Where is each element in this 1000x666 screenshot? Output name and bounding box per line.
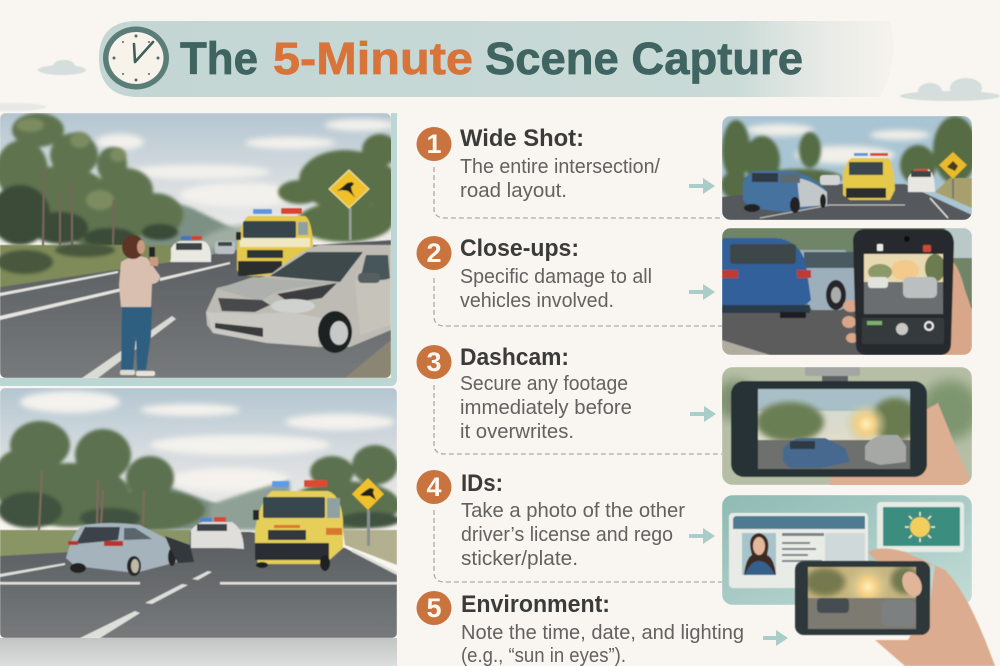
grey band under bottom photo [0,638,397,666]
body: dashcam [460,373,632,443]
title text: The [180,33,258,84]
footage screen [756,389,919,470]
thumbnail 3: dashcam footage [715,367,980,490]
phone landscape [731,381,927,477]
hand [868,548,995,666]
body: dashcam: it overwrites. [460,421,574,443]
blue hatchback [743,171,828,213]
hand and phone: environment capture [795,548,995,666]
step 1 [416,125,722,218]
heading: IDs: IDs: [461,470,503,497]
arrow [689,528,715,544]
ambulance [236,208,313,276]
road [0,240,391,378]
dashed connector [434,278,722,326]
licence card [729,513,868,588]
phone screen [805,565,919,629]
road [0,532,397,638]
police car [171,236,211,262]
title text: 5-Minute [273,33,473,84]
tree line [0,113,399,255]
body: IDs [461,500,685,570]
arrow [689,178,715,194]
body: IDs: driver’s license and rego [461,524,673,546]
police car [908,169,935,192]
decorative clouds [0,60,1000,111]
number badge 2 [416,236,452,270]
dashed connector [434,510,722,582]
number badge 5 [416,591,452,625]
phone body [795,561,930,635]
title text [180,33,803,84]
number badge 1 [416,127,452,161]
road markings [0,262,230,378]
hand [830,403,970,490]
panel: bottom photo, intersection with ambulance [0,388,400,638]
trees [0,421,400,530]
body: dashcam: immediately before [460,397,632,419]
photo frame: teal edge of top photo [0,113,397,386]
heading: Close-ups: Close-ups: [460,235,579,262]
number badge 5: 5 [426,593,442,623]
hand holding phone [842,258,972,355]
title banner [99,21,893,97]
ambulance [843,153,895,200]
silver-blue car [798,250,862,310]
number badge 1: 1 [426,129,442,159]
icon: kangaroo sign [939,152,967,198]
blue car rear [722,238,811,318]
crashed silver-blue car [66,523,194,576]
dashed connector [434,167,722,218]
verge grass [0,530,200,558]
step 2 [416,235,722,326]
body: close-ups [460,266,652,312]
police car [191,517,244,549]
number badge 3 [416,345,452,379]
number badge 4: 4 [426,472,442,502]
woman taking photo [119,235,160,376]
icon: kangaroo warning sign [329,170,369,240]
body: wide shot [460,156,660,202]
road markings [0,549,397,638]
sky [0,388,397,502]
icon: kangaroo warning sign [352,478,384,546]
body: close-ups: Specific damage to all [460,266,652,288]
arrow [690,406,716,422]
thumb [898,568,926,600]
heading: Dashcam: Dashcam: [460,344,569,371]
heading: Environment: Environment: [461,591,610,618]
body: wide shot: The entire intersection/ [460,156,660,178]
panel: top photo, woman photographing crash scene [0,113,399,378]
step 3 [416,344,722,454]
body: wide shot: road layout. [460,180,567,202]
sky [0,113,391,243]
rego sun card [877,502,964,552]
distant car [215,241,235,254]
icon: clock [103,26,169,90]
body: close-ups: vehicles involved. [460,290,614,312]
body: dashcam: Secure any footage [460,373,628,395]
thumbnail 4: licence and rego [722,495,972,605]
arrow [689,284,715,300]
dashcam mount [805,367,860,382]
title text: Scene Capture [485,33,803,84]
thumbnail 1: wide shot [721,116,977,220]
body: environment: Note the time, date, and lighting [461,622,744,644]
step 5 [416,591,788,666]
step 4 [416,470,722,582]
banner pill [99,21,893,97]
ambulance [253,480,343,571]
dashed connector [434,385,722,454]
silver damaged car [206,245,391,353]
body: environment [461,622,744,666]
body: IDs: Take a photo of the other [461,500,685,522]
phone [853,229,954,355]
thumbnail 2: close-ups with phone [722,228,972,355]
heading: Wide Shot: Wide Shot: [460,125,584,152]
number badge 2: 2 [426,238,442,268]
number badge 4 [416,470,452,504]
body: IDs: sticker/plate. [461,548,578,570]
distant car [820,175,840,185]
number badge 3: 3 [426,347,442,377]
roadside grass [0,245,175,288]
arrow [763,630,788,646]
